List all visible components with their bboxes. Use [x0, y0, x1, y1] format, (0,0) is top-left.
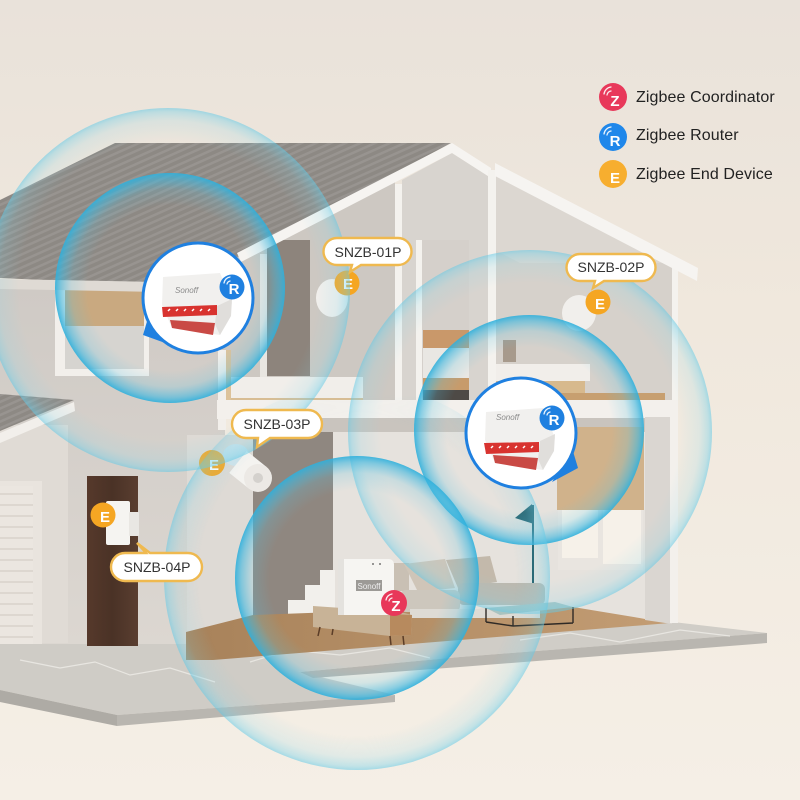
- device: SNZB-01P sensor: [316, 279, 348, 317]
- marble ground slab: [0, 622, 767, 726]
- badge: SNZB-04P end device: [90, 502, 116, 528]
- garage door: [0, 481, 42, 644]
- legend item: end device: E: [610, 170, 620, 187]
- legend item: coordinator: Z: [610, 93, 620, 110]
- stairs: [288, 570, 335, 617]
- legend item: router: [599, 123, 739, 151]
- upper left window: [55, 290, 149, 376]
- callout: router two: [466, 378, 578, 488]
- legend item: router: R: [610, 133, 621, 150]
- ceiling shadow: [253, 418, 645, 432]
- floor slab: [217, 400, 678, 419]
- signal range: top left outer: [0, 108, 350, 472]
- bedroom one: [218, 178, 395, 430]
- badge: gateway coordinator: [381, 590, 407, 616]
- label: SNZB-01P: [324, 238, 412, 272]
- device: Zigbee gateway: Sonoff: [358, 582, 381, 591]
- signal range: top left inner: [55, 173, 285, 403]
- label: SNZB-04P: SNZB-04P: [124, 559, 190, 575]
- signal range: right inner: [414, 315, 644, 545]
- coffee table: [486, 602, 573, 626]
- label: SNZB-02P: [566, 254, 656, 288]
- label: SNZB-03P: [232, 410, 322, 447]
- main roof: [0, 143, 451, 285]
- callout: router one: [143, 243, 253, 353]
- upper floor section: [217, 143, 698, 430]
- bedroom two: [402, 153, 488, 405]
- router device one: Sonoff: [175, 286, 199, 295]
- device: SNZB-02P sensor: [562, 295, 596, 331]
- router badge one: R: [229, 281, 240, 298]
- badge: SNZB-02P end device: [586, 290, 610, 314]
- legend item: end device: Zigbee End Device: [636, 166, 773, 183]
- bedroom three: [495, 172, 672, 405]
- badge: SNZB-02P end device: E: [595, 296, 605, 313]
- right pier: [645, 417, 672, 624]
- partition walls: [395, 170, 678, 414]
- device: SNZB-03P sensor: [223, 444, 272, 492]
- roof fascia: [0, 279, 160, 292]
- legend item: coordinator: Zigbee Coordinator: [636, 89, 775, 106]
- house illustration: [0, 143, 767, 726]
- badge: gateway coordinator: Z: [391, 598, 401, 615]
- back wall: [253, 418, 645, 618]
- floor lamp: [515, 504, 534, 585]
- label: SNZB-03P: SNZB-03P: [244, 416, 310, 432]
- roof edge right: [495, 163, 698, 281]
- front door: [87, 476, 138, 646]
- console table: [313, 606, 412, 645]
- roof edge left: [237, 143, 491, 262]
- router badge two: R: [549, 412, 560, 429]
- label: SNZB-04P: [111, 543, 202, 581]
- signal range: right outer: [348, 250, 712, 614]
- router device two: Sonoff: [496, 413, 520, 422]
- ground floor section: [186, 414, 678, 660]
- label: SNZB-01P: SNZB-01P: [335, 244, 401, 260]
- wood floor: [186, 607, 670, 660]
- garage wall: [0, 425, 68, 643]
- badge: SNZB-04P end device: E: [100, 509, 110, 526]
- device: Zigbee gateway: [338, 559, 394, 615]
- device: SNZB-04P sensor: [106, 501, 139, 545]
- sofa: [393, 556, 545, 618]
- legend item: end device: [599, 160, 773, 188]
- label: SNZB-02P: SNZB-02P: [578, 259, 644, 275]
- badge: SNZB-01P end device: [334, 270, 360, 296]
- signal range: bottom inner: [235, 456, 479, 700]
- lower window: [557, 427, 644, 570]
- legend item: coordinator: [599, 83, 775, 111]
- entrance column: [187, 435, 253, 640]
- left facade wall: [0, 288, 225, 644]
- legend: [599, 83, 775, 188]
- understair dark wall: [253, 430, 333, 620]
- small lower roof: [0, 394, 75, 443]
- badge: SNZB-03P end device: E: [209, 457, 219, 474]
- signal range: bottom outer: [164, 384, 550, 770]
- badge: SNZB-01P end device: E: [343, 276, 353, 293]
- legend item: router: Zigbee Router: [636, 127, 739, 144]
- badge: SNZB-03P end device: [199, 450, 225, 476]
